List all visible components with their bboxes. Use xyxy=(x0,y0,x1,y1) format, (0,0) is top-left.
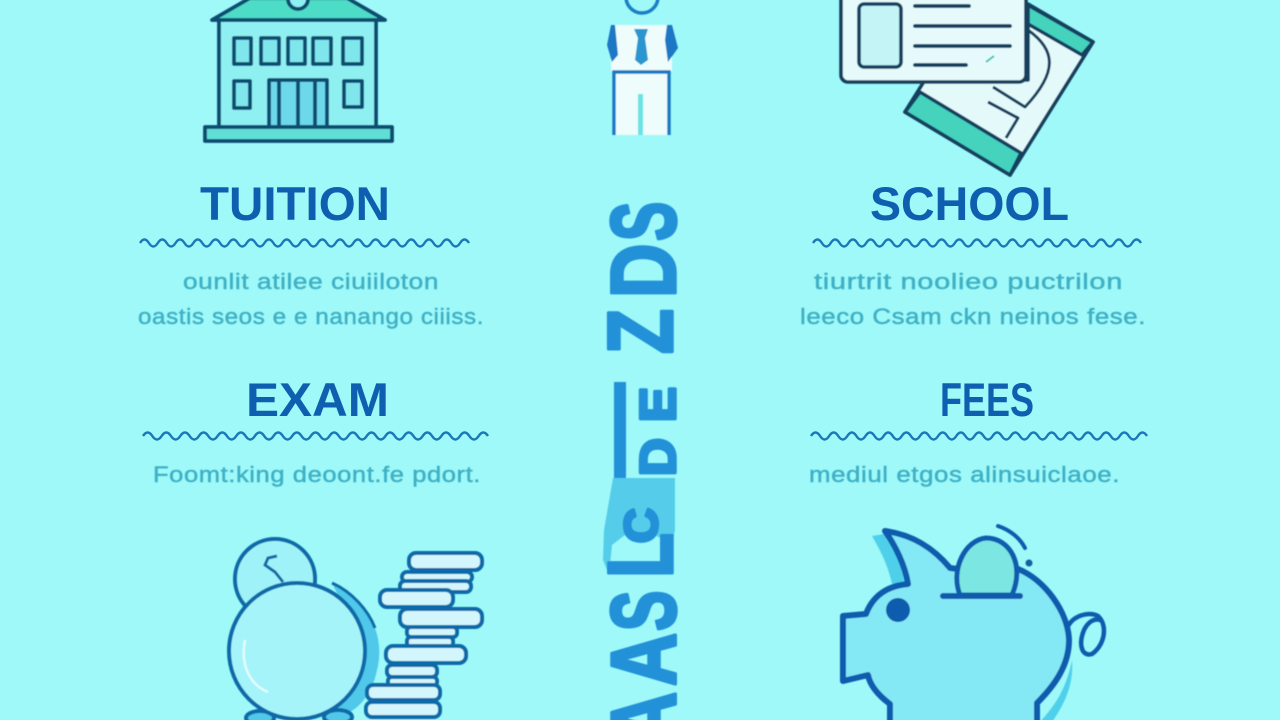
vertical title text: C xyxy=(615,508,667,543)
divider wave xyxy=(813,240,1141,246)
shadow xyxy=(872,534,1072,720)
vertical title text: S xyxy=(593,202,695,241)
eye xyxy=(886,598,910,622)
vertical title text xyxy=(589,202,695,720)
icon: overlapping cards xyxy=(841,0,1093,175)
vertical title text: D xyxy=(630,438,686,476)
icon: piggy bank xyxy=(843,526,1104,720)
divider wave xyxy=(811,432,1147,440)
icon: person in shirt and trousers xyxy=(607,0,678,135)
heading: EXAM: EXAM xyxy=(246,373,389,426)
heading: TUITION: TUITION xyxy=(200,177,390,230)
coin xyxy=(957,538,1017,595)
big coin xyxy=(246,711,274,720)
vertical title text: Z xyxy=(589,309,692,354)
text block: tuition: ounlit atilee ciuiiloton xyxy=(183,269,439,294)
slot xyxy=(943,593,1020,599)
divider wave xyxy=(140,240,469,246)
vertical title text: D xyxy=(592,244,695,298)
motion marks xyxy=(998,526,1025,548)
text block: school: leeco Csam ckn neinos fese. xyxy=(800,304,1146,329)
stacked coins xyxy=(366,553,482,717)
tail xyxy=(1068,614,1104,654)
small coin xyxy=(235,539,315,619)
heading: SCHOOL: SCHOOL xyxy=(870,177,1069,230)
text block: fees: mediul etgos alinsuiclaoe. xyxy=(809,462,1120,487)
text block: school xyxy=(800,269,1146,329)
body xyxy=(843,531,1069,720)
divider wave xyxy=(143,432,488,440)
icon: school building xyxy=(205,0,392,141)
icon: coins and stack xyxy=(229,539,482,720)
vertical title text: S xyxy=(591,591,695,631)
vertical title text: L xyxy=(589,533,692,578)
crescent xyxy=(330,583,379,716)
text block: tuition: oastis seos e e nanango ciiiss. xyxy=(138,304,484,329)
heading: FEES: FEES xyxy=(940,373,1034,426)
text block: exam: Foomt:king deoont.fe pdort. xyxy=(153,462,481,487)
vertical title text: E xyxy=(630,387,686,422)
text block: tuition xyxy=(138,269,484,329)
teal patch behind vertical text xyxy=(603,478,675,575)
vertical title text: A xyxy=(592,633,695,686)
text block: school: tiurtrit noolieo puctrilon xyxy=(814,269,1123,294)
